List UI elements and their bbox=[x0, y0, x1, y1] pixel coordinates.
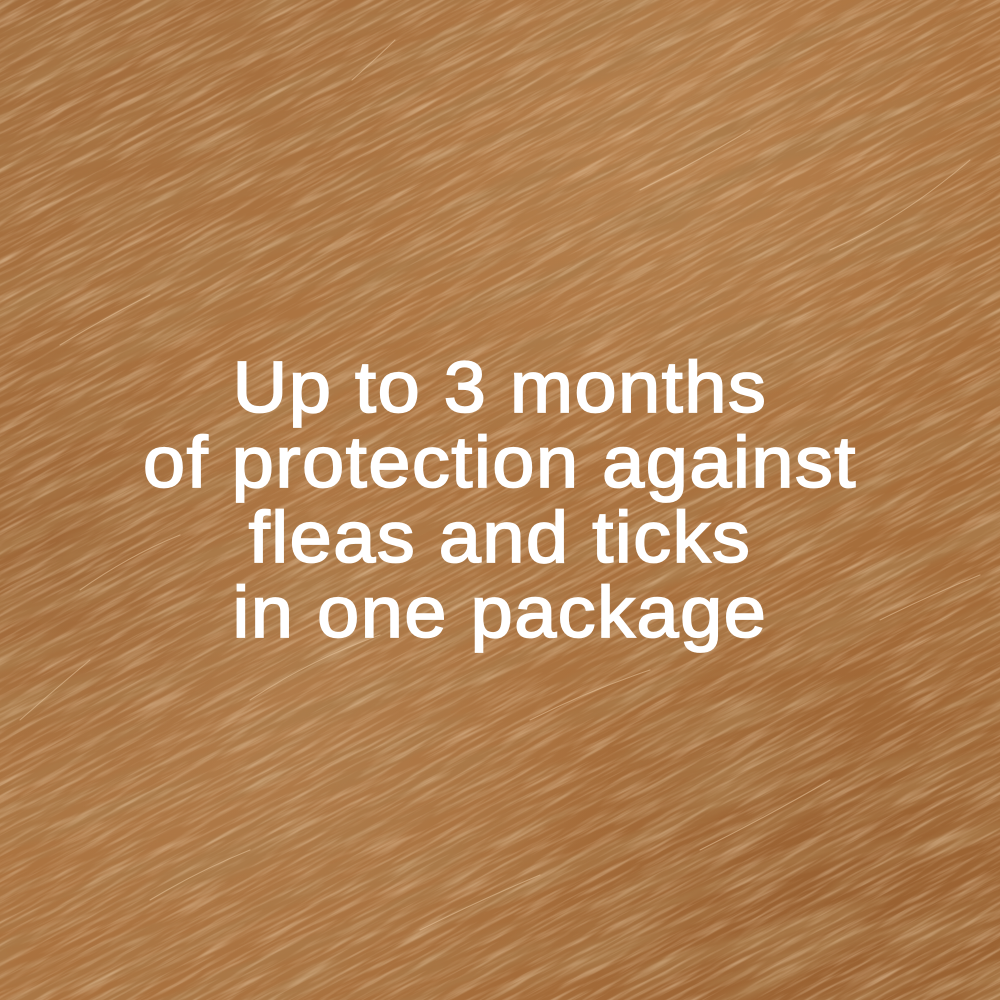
headline: Up to 3 months bbox=[233, 348, 767, 428]
headline: fleas and ticks bbox=[249, 498, 751, 578]
headline: in one package bbox=[233, 573, 767, 653]
headline: of protection against bbox=[143, 423, 857, 503]
headline bbox=[143, 348, 857, 653]
